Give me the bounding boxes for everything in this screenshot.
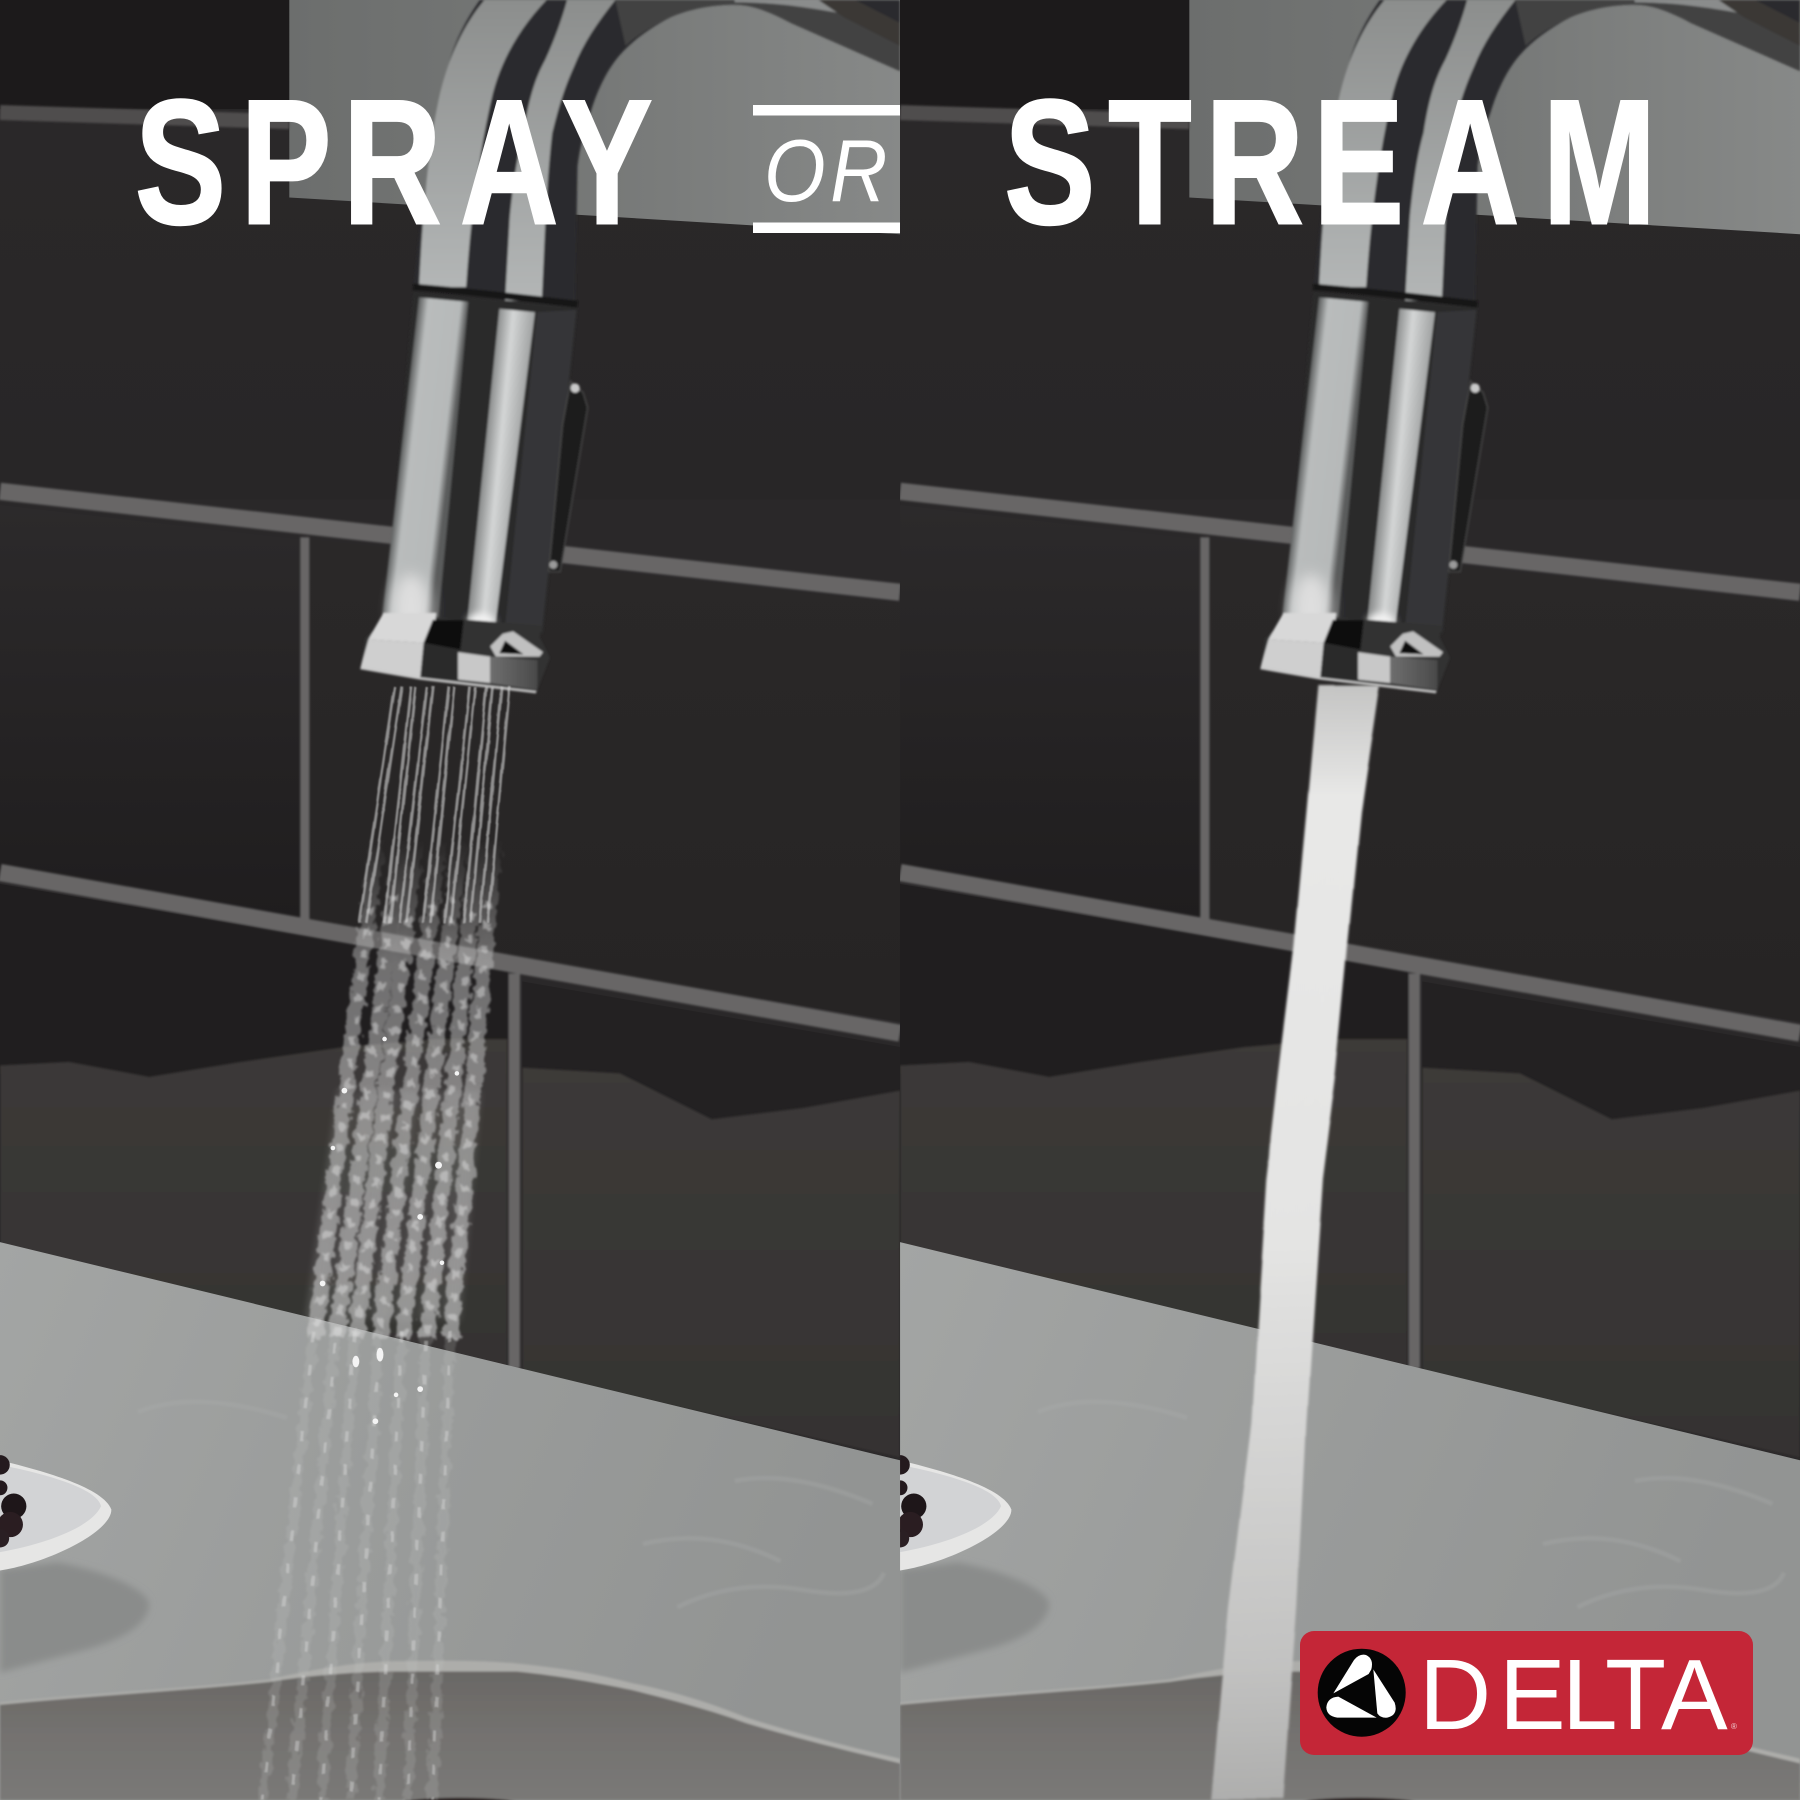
falling sheets over counter <box>263 1332 450 1800</box>
collar ring <box>413 287 577 304</box>
bright water beads <box>315 895 488 1337</box>
heading: SPRAY: SPRAY <box>135 62 653 262</box>
registered mark: ® <box>1731 1722 1737 1731</box>
falling droplets <box>263 1332 450 1800</box>
backsplash wall <box>900 122 1800 1460</box>
window reflection <box>1189 0 1800 234</box>
faucet neck <box>1313 0 1800 308</box>
spray button <box>549 381 588 572</box>
collar ring <box>1313 287 1477 304</box>
spray button <box>1449 381 1488 572</box>
faucet sprayhead body <box>1285 292 1477 634</box>
water: seven spray streams <box>263 687 510 1800</box>
divider word: OR <box>753 105 900 233</box>
plate and fruit <box>890 1455 1049 1673</box>
tile grout lines <box>0 113 900 1368</box>
countertop <box>0 1242 900 1800</box>
plate and fruit <box>0 1455 149 1673</box>
aerator flange <box>360 613 550 692</box>
faucet sprayhead body <box>385 292 577 634</box>
backsplash wall <box>0 505 900 1460</box>
Delta triangle emblem <box>1318 1649 1406 1737</box>
faucet neck <box>413 0 900 308</box>
sink basin <box>900 1661 1800 1800</box>
faucet <box>1261 0 1800 692</box>
marble veining <box>1038 1402 1784 1607</box>
water sparkles <box>320 1037 459 1424</box>
soft water haze <box>315 1091 472 1320</box>
water: solid stream <box>1211 687 1380 1800</box>
window reflection <box>289 0 900 234</box>
tile grout lines <box>900 113 1800 1368</box>
panel: spray photo <box>0 0 900 1800</box>
beaded middle jets <box>315 838 495 1337</box>
aerator flange <box>1261 613 1450 692</box>
Delta logo badge <box>1300 1631 1753 1755</box>
faucet <box>360 0 900 692</box>
divider word: OR: OR <box>764 121 887 220</box>
marble veining <box>138 1402 884 1607</box>
sink basin <box>0 1661 900 1800</box>
heading: STREAM: STREAM <box>1004 62 1656 262</box>
upper fine jets <box>359 687 510 923</box>
countertop <box>900 1242 1800 1800</box>
Delta wordmark: DELTA <box>1419 1639 1728 1751</box>
panel: stream photo <box>890 0 1800 1800</box>
